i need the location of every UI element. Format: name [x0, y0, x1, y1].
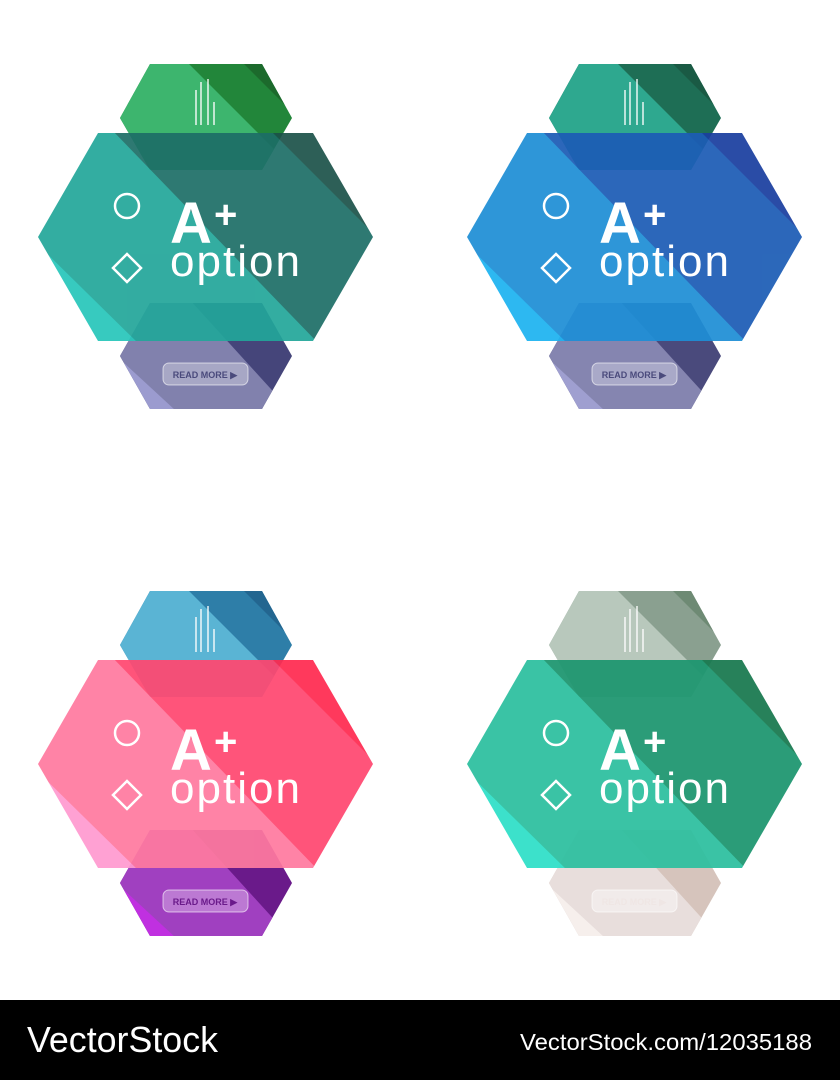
footer bar — [0, 1000, 840, 1080]
button: read more — [592, 363, 677, 385]
heading: A+ option: A — [599, 718, 641, 783]
icon: bars — [625, 606, 643, 652]
heading: A+ option: A — [170, 718, 212, 783]
heading: A+ option: + — [214, 720, 237, 764]
icon: circle — [544, 721, 568, 745]
heading: A+ option: + — [643, 720, 666, 764]
heading: A+ option: option — [170, 237, 300, 286]
heading: A+ option — [170, 718, 300, 813]
footer: brand: VectorStock — [27, 1019, 219, 1060]
icon: diamond — [113, 254, 141, 282]
heading: A+ option: option — [599, 237, 729, 286]
bottom hexagon — [120, 830, 292, 936]
bottom hexagon — [120, 303, 292, 409]
top hexagon with bar icon — [549, 591, 721, 660]
big hexagon — [459, 657, 809, 877]
icon: diamond — [542, 781, 570, 809]
heading: A+ option — [599, 191, 729, 286]
icon: diamond — [542, 254, 570, 282]
top hexagon with bar icon — [120, 591, 292, 697]
heading: A+ option: A — [599, 191, 641, 256]
top hexagon with bar icon — [120, 64, 292, 170]
heading: A+ option — [170, 191, 300, 286]
icon: bars — [196, 79, 214, 125]
module: green (bottom-right) — [459, 587, 809, 947]
icon: bars — [625, 79, 643, 125]
module: blue (top-right) — [459, 60, 809, 420]
big hexagon — [30, 657, 380, 877]
button: read more: READ MORE ▶ — [173, 897, 238, 907]
big hexagon — [30, 130, 380, 350]
heading: A+ option: + — [214, 193, 237, 237]
top hexagon with bar icon — [549, 64, 721, 170]
icon: diamond — [113, 781, 141, 809]
icon: circle — [115, 721, 139, 745]
icon: circle — [544, 194, 568, 218]
heading: A+ option: option — [170, 764, 300, 813]
heading: A+ option: A — [170, 191, 212, 256]
icon: circle — [115, 194, 139, 218]
bottom hexagon — [549, 868, 721, 936]
button: read more — [592, 890, 677, 912]
heading: A+ option: + — [643, 193, 666, 237]
footer: url: VectorStock.com/12035188 — [520, 1029, 812, 1055]
button: read more: READ MORE ▶ — [602, 370, 667, 380]
icon: bars — [196, 606, 214, 652]
button: read more — [163, 363, 248, 385]
button: read more: READ MORE ▶ — [602, 897, 667, 907]
big hexagon — [459, 130, 809, 350]
bottom hexagon — [549, 303, 721, 409]
module: pink (bottom-left) — [30, 587, 380, 947]
heading: A+ option — [599, 718, 729, 813]
module: green teal (top-left) — [30, 60, 380, 420]
heading: A+ option: option — [599, 764, 729, 813]
button: read more: READ MORE ▶ — [173, 370, 238, 380]
button: read more — [163, 890, 248, 912]
